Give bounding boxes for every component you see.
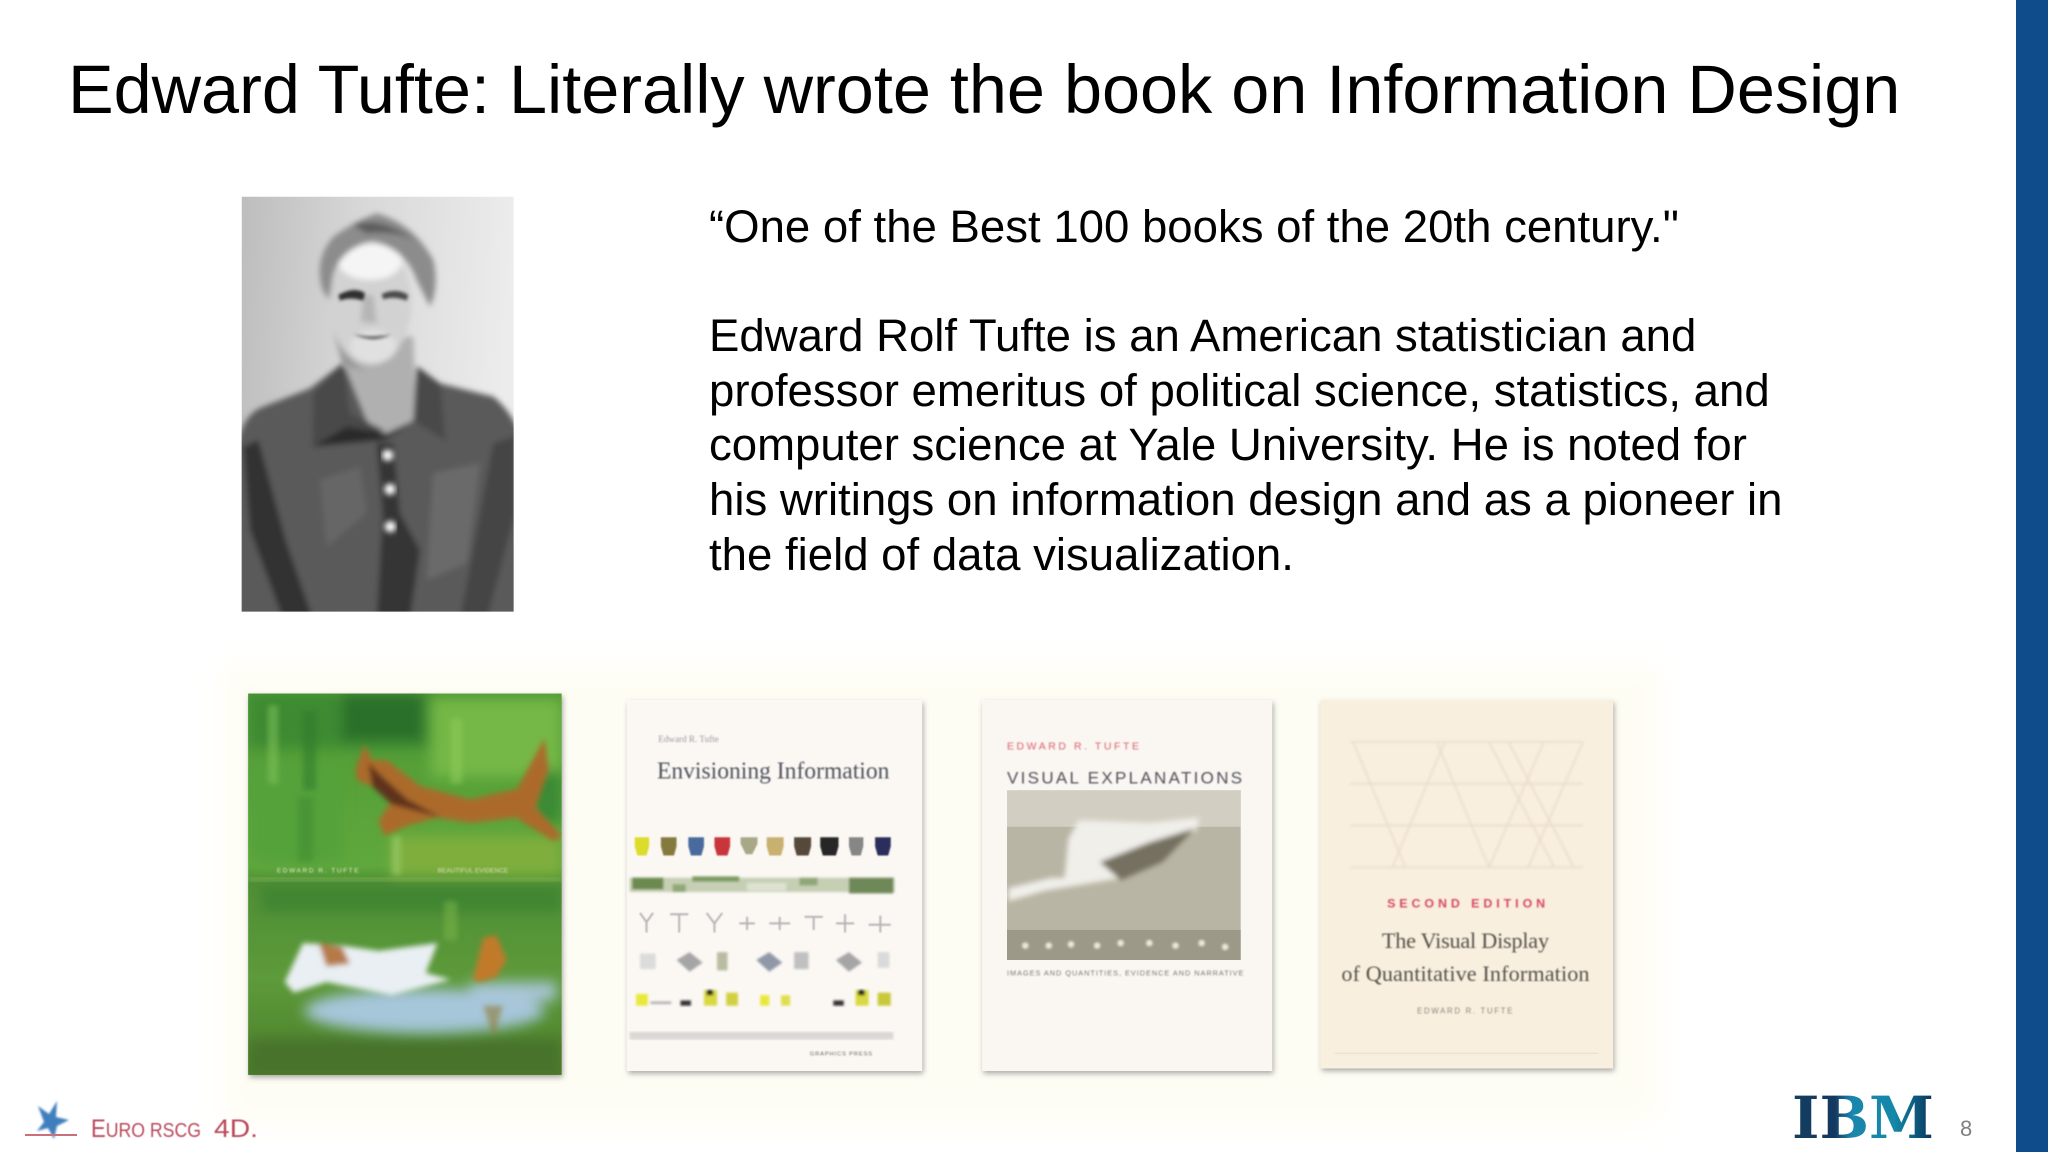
quote and biography text: “One of the Best 100 books of the 20th century." bbox=[709, 201, 1679, 252]
quote and biography text: computer science at Yale University. He is noted for bbox=[709, 419, 1747, 470]
book: Beautiful Evidence: BEAUTIFUL EVIDENCE bbox=[438, 867, 509, 874]
logo: Euro RSCG 4D: 4D. bbox=[214, 1115, 258, 1143]
book: The Visual Display of Quantitative Information: of Quantitative Information bbox=[1341, 961, 1590, 986]
logo: IBM: IBM bbox=[1792, 1084, 1934, 1152]
buttons bbox=[382, 450, 396, 532]
portrait photo of Edward Tufte bbox=[237, 197, 520, 620]
quote and biography text: the field of data visualization. bbox=[709, 529, 1294, 580]
quote and biography text: his writings on information design and as a pioneer in bbox=[709, 474, 1783, 525]
book: Visual Explanations bbox=[982, 700, 1272, 1071]
cover picture bbox=[1007, 790, 1241, 960]
title: Edward Tufte: Literally wrote the book on Information Design bbox=[68, 52, 1900, 128]
mottled green band bbox=[630, 876, 895, 893]
book: Beautiful Evidence bbox=[248, 694, 562, 1078]
right blue side bar bbox=[2016, 0, 2048, 1152]
author: EDWARD R. TUFTE bbox=[1007, 742, 1139, 753]
head bbox=[320, 213, 436, 370]
book: Envisioning Information: GRAPHICS PRESS bbox=[810, 1051, 873, 1057]
logo: Euro RSCG 4D: EURO RSCG bbox=[91, 1115, 201, 1143]
dog bbox=[355, 738, 562, 841]
cover small text: EDWARD R. TUFTE bbox=[277, 867, 360, 874]
row of shirts bbox=[635, 837, 891, 855]
bottom rule and imprint bbox=[630, 1032, 893, 1040]
gray diagram rows bbox=[640, 913, 891, 933]
book: The Visual Display of Quantitative Information bbox=[1320, 700, 1613, 1068]
shirt mass bbox=[237, 337, 520, 620]
eyes and mouth bbox=[338, 290, 408, 339]
quote and biography text bbox=[709, 201, 1783, 580]
logo: Euro RSCG 4D bbox=[25, 1101, 258, 1143]
water splash bbox=[304, 982, 556, 1033]
lattice drawing bbox=[1351, 742, 1583, 867]
edition label: SECOND EDITION bbox=[1387, 897, 1545, 911]
star bbox=[37, 1101, 69, 1139]
quote and biography text: professor emeritus of political science, statistics, and bbox=[709, 365, 1770, 416]
title: VISUAL EXPLANATIONS bbox=[1007, 769, 1242, 788]
book: Envisioning Information bbox=[627, 700, 922, 1071]
yellow and black row bbox=[636, 990, 891, 1006]
pale cream backdrop behind books bbox=[222, 664, 1662, 1124]
subtitle: IMAGES AND QUANTITIES, EVIDENCE AND NARRATIVE bbox=[1007, 969, 1244, 978]
title: The Visual Display bbox=[1382, 928, 1549, 953]
page number: 8 bbox=[1960, 1116, 1972, 1141]
quote and biography text: Edward Rolf Tufte is an American statistician and bbox=[709, 310, 1696, 361]
author: Edward R. Tufte bbox=[658, 734, 719, 744]
author: EDWARD R. TUFTE bbox=[1417, 1007, 1512, 1016]
title: Envisioning Information bbox=[657, 757, 889, 784]
